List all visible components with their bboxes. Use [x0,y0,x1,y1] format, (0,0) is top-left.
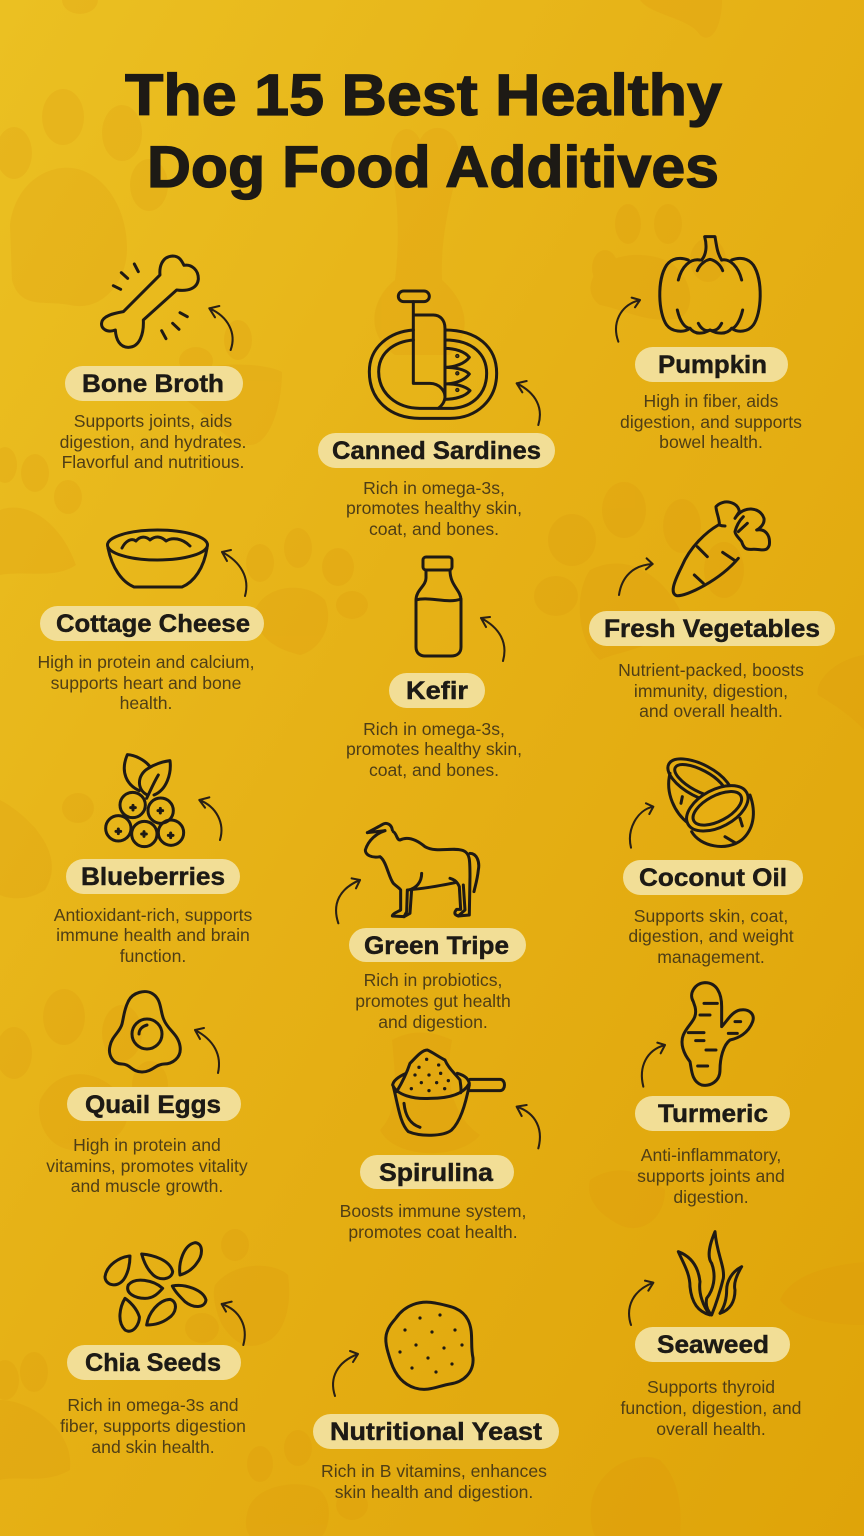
description: and overall health. [639,701,783,721]
description [637,1145,785,1207]
label pill: Cottage Cheese [56,610,250,638]
item: Coconut Oil [623,750,803,967]
arrow [616,298,640,342]
description [37,652,255,713]
item: Quail Eggs [46,992,248,1196]
label pill: Chia Seeds [85,1349,221,1377]
description [355,970,511,1032]
description: promotes coat health. [348,1222,518,1242]
arrow [333,1351,358,1396]
arrow [481,617,504,661]
description [346,478,522,539]
description: Supports skin, coat, [634,906,788,926]
icon: seeds [105,1243,206,1331]
description: digestion. [673,1187,749,1207]
description: Rich in omega-3s and [67,1395,239,1415]
label pill [635,1327,790,1362]
description: overall health. [656,1419,766,1439]
description [60,1395,246,1457]
description [54,905,252,966]
icon: carrot [673,502,770,596]
icon: sardine can [369,291,497,418]
item: Fresh Vegetables [589,502,835,721]
description: skin health and digestion. [335,1482,533,1502]
label pill [360,1155,514,1189]
icon: yeast flake [386,1302,473,1389]
arrow [222,1302,245,1345]
label pill [313,1414,559,1449]
description: and muscle growth. [71,1176,223,1196]
description: management. [657,947,765,967]
description [60,411,246,472]
arrow [642,1043,665,1087]
description: Rich in probiotics, [364,970,502,990]
icon: bowl of cottage cheese [108,530,208,587]
icon: blueberries with leaves [106,755,184,847]
label pill: Spirulina [379,1159,494,1187]
label pill [635,1096,790,1131]
label pill: Fresh Vegetables [604,615,820,643]
item: Bone Broth [60,256,246,472]
description: coat, and bones. [369,760,499,780]
label pill [67,1345,241,1380]
icon: pumpkin [660,237,760,333]
description: Rich in omega-3s, [363,719,505,739]
arrow [336,878,360,923]
description: Anti-inflammatory, [641,1145,781,1165]
arrow [629,1281,653,1325]
arrow [222,550,246,596]
description: fiber, supports digestion [60,1416,246,1436]
label pill: Seaweed [657,1331,769,1359]
description [340,1201,526,1242]
description: digestion, and weight [628,926,794,946]
label pill: Kefir [406,677,468,705]
title: Dog Food Additives [147,135,719,200]
item: Cottage Cheese [37,530,264,713]
icon: turmeric root [682,983,753,1085]
description [628,906,794,967]
label pill: Turmeric [658,1100,768,1128]
description: immunity, digestion, [634,681,788,701]
description: Supports thyroid [647,1377,775,1397]
item: Canned Sardines [318,291,555,539]
description: High in protein and [73,1135,221,1155]
label pill: Quail Eggs [85,1091,221,1119]
icon: bottle [416,557,461,656]
arrow [619,558,653,595]
description: Boosts immune system, [340,1201,526,1221]
label pill: Pumpkin [658,351,767,379]
icon: fried egg [110,992,180,1072]
label pill: Bone Broth [82,370,224,398]
description: Rich in B vitamins, enhances [321,1461,547,1481]
item: Nutritional Yeast [313,1302,559,1502]
icon: bone [102,256,198,347]
title: The 15 Best Healthy [125,63,722,128]
arrow [209,306,233,350]
description: Antioxidant-rich, supports [54,905,252,925]
description [346,719,522,780]
label pill [65,366,243,401]
description: bowel health. [659,432,763,452]
description [620,391,802,452]
item: Seaweed [621,1232,801,1439]
label pill [66,859,240,894]
arrow [517,1105,540,1148]
description: vitamins, promotes vitality [46,1156,248,1176]
description: Nutrient-packed, boosts [618,660,804,680]
description [618,660,804,721]
arrow [630,803,653,848]
title [125,63,722,200]
description: and skin health. [91,1437,215,1457]
description: digestion, and hydrates. [60,432,246,452]
label pill [349,928,526,962]
arrow [517,381,540,425]
description: function. [120,946,186,966]
label pill: Blueberries [81,863,225,891]
item: Green Tripe [336,823,526,1032]
description: Flavorful and nutritious. [62,452,244,472]
label pill [389,673,485,708]
description [621,1377,801,1439]
item: Blueberries [54,755,252,966]
description: Supports joints, aids [74,411,232,431]
description: supports heart and bone [51,673,241,693]
description: High in fiber, aids [644,391,779,411]
arrow [199,797,221,840]
description: digestion, and supports [620,412,802,432]
description: immune health and brain [56,925,250,945]
label pill [318,433,555,468]
label pill: Coconut Oil [639,864,787,892]
description: promotes healthy skin, [346,498,522,518]
description [46,1135,248,1196]
item: Chia Seeds [60,1243,246,1457]
label pill: Nutritional Yeast [330,1418,543,1446]
label pill [40,606,264,641]
label pill [589,611,835,646]
label pill [635,347,788,382]
item: Turmeric [635,983,790,1207]
description: promotes healthy skin, [346,739,522,759]
description: High in protein and calcium, [37,652,255,672]
arrow [195,1028,219,1073]
label pill: Canned Sardines [332,437,541,465]
description: and digestion. [378,1012,488,1032]
icon: coconut halves [661,750,756,846]
description: health. [120,693,172,713]
label pill [623,860,803,895]
item: Pumpkin [616,237,802,452]
label pill: Green Tripe [364,932,509,960]
item: Kefir [346,557,522,780]
icon: scoop of powder [393,1050,504,1135]
icon: cow [365,823,479,917]
item: Spirulina [340,1050,540,1242]
icon: seaweed [678,1232,742,1315]
description: coat, and bones. [369,519,499,539]
description: function, digestion, and [621,1398,801,1418]
description: supports joints and [637,1166,785,1186]
description [321,1461,547,1502]
label pill [67,1087,241,1121]
description: promotes gut health [355,991,511,1011]
description: Rich in omega-3s, [363,478,505,498]
